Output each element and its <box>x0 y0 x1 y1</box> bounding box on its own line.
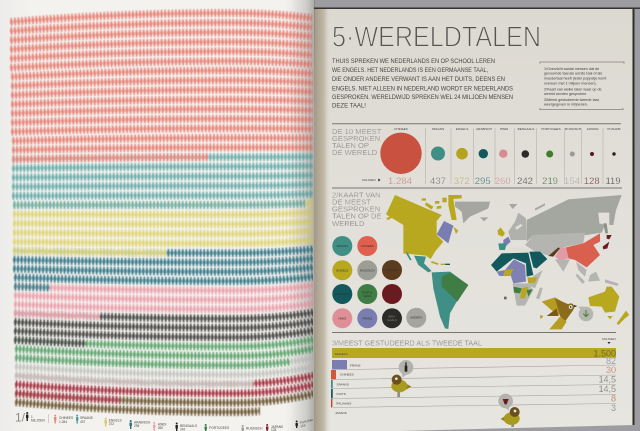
legend: Engels: 372 <box>109 422 114 426</box>
bar: Spaans <box>331 374 616 388</box>
intro text: DEZE TAAL! <box>332 102 366 110</box>
contents key box: weergegeven in miljoenen. <box>544 102 588 106</box>
values: 154 <box>564 176 581 187</box>
legend: Japans <box>266 424 283 431</box>
panel: pictogram legend <box>15 410 313 431</box>
values: 219 <box>542 176 558 187</box>
legend: Hindi: HINDI <box>158 422 166 426</box>
map legend circles: FRANS <box>362 316 372 320</box>
map legend circles <box>332 236 426 328</box>
legend: one million: 1 <box>31 415 33 419</box>
section rules <box>332 187 622 189</box>
heading: DE MEEST <box>332 198 371 207</box>
map legend circles: GAALS <box>387 318 397 322</box>
intro text: THUIS SPREKEN WE NEDERLANDS EN OP SCHOOL LEREN <box>332 58 495 65</box>
bar: Chinees <box>331 365 616 380</box>
icon: bird with bottle bubble <box>391 360 413 397</box>
language labels: PORTUGEES <box>541 127 561 131</box>
heading <box>332 127 382 157</box>
legend: one million: MILJOEN <box>31 418 46 422</box>
values: 372 <box>454 176 470 187</box>
heading <box>332 191 382 228</box>
contents key box: 3/Meest gestudeerde tweede taal, <box>544 98 600 102</box>
map legend circles: PUNJABI <box>386 268 398 272</box>
right page background <box>316 9 634 431</box>
heading: GESPROKEN <box>332 134 380 143</box>
bar: Italiaans: 8 <box>611 394 616 404</box>
bar: Engels <box>332 348 616 358</box>
intro text <box>332 58 513 110</box>
map legend circles: PORTU- <box>362 290 373 294</box>
map legend circles: ARABISCH <box>335 292 350 296</box>
heading: DE WERELD <box>332 148 378 157</box>
language labels: RUSSISCH <box>565 127 581 131</box>
legend number: 1/ <box>15 410 26 424</box>
intro text: WE ENGELS. HET NEDERLANDS IS EEN GERMAANSE TAAL, <box>332 67 488 74</box>
bar: Engels: ENGELS <box>335 352 348 356</box>
legend: Portugees: PORTUGEES <box>209 426 229 430</box>
legend: Spaans: 437 <box>80 420 86 424</box>
language labels: ARABISCH <box>476 127 492 131</box>
legend: Russisch: RUSSISCH <box>246 426 263 430</box>
legend: Arabisch: ARABISCH <box>134 420 151 424</box>
bar: Chinees: CHINEES <box>340 372 354 376</box>
bar: Japans: JAPANS <box>335 411 347 415</box>
contents key box: wereld worden gesproken. <box>544 92 587 96</box>
contents key box: genoemde taal als eerste taal of als <box>544 72 602 76</box>
unit label: MILJOEN <box>602 337 616 341</box>
values: 119 <box>605 176 621 187</box>
legend: Engels: ENGELS <box>109 418 122 422</box>
legend: Engels <box>104 418 122 426</box>
values: 128 <box>584 176 600 187</box>
spine shadow over the grid <box>290 0 315 431</box>
legend: Hindi <box>153 422 166 431</box>
contents key box: overeen met 1 miljoen mensen). <box>544 82 597 86</box>
bar: Engels: 1.500 <box>593 348 616 358</box>
map legend circles: BEN- <box>389 314 395 318</box>
legend: Chinees: 1.284 <box>59 420 67 424</box>
bar: Italiaans <box>331 394 616 408</box>
language labels: SPAANS <box>432 127 444 131</box>
heading: 2/KAART VAN <box>332 191 381 200</box>
legend: Arabisch: 295 <box>134 424 140 428</box>
values <box>388 176 621 187</box>
panel: ten most spoken languages <box>332 127 621 187</box>
legend: Spaans: SPAANS <box>80 416 93 420</box>
bar: Duits: DUITS <box>336 392 346 396</box>
legend: Bengaals <box>176 422 197 431</box>
backdrop behind the book <box>314 0 640 431</box>
map legend circles: ENGELS <box>336 268 348 272</box>
map: Europe, Asia, Africa and Oceania <box>491 195 629 329</box>
proportional circles <box>380 133 616 174</box>
legend: Punjabi: PUNJABI <box>299 418 313 425</box>
contents key box: 1/Overzicht aantal mensen dat de <box>544 67 599 71</box>
legend: Russisch <box>242 425 263 431</box>
legend: Japans: JAPANS <box>271 425 283 429</box>
language labels: JAPANS <box>587 127 598 131</box>
icon: bird on map <box>540 297 577 329</box>
contents key box: moedertaal heeft (ieder poppetje komt <box>544 76 606 80</box>
section rules <box>332 123 621 125</box>
contents key box <box>540 62 624 110</box>
right page edge <box>632 9 634 425</box>
contents key box: 2/Kaart van welke talen waar op de <box>544 88 602 92</box>
unit label <box>602 337 616 344</box>
unit label: MILJOEN <box>362 178 376 182</box>
language labels: CHINEES <box>394 127 408 131</box>
bar: Chinees: 30 <box>606 365 616 375</box>
icon: bird with cow bubble <box>498 394 520 427</box>
heading: DE 10 MEEST <box>332 127 382 136</box>
legend: Portugees <box>204 424 229 431</box>
legend divider <box>47 414 50 423</box>
intro text: DIE ONDER ANDERE VERWANT IS AAN HET DUITS, DEENS EN <box>332 76 505 83</box>
language labels: PUNJABI <box>607 127 621 131</box>
heading: TALEN OP DE <box>332 212 382 221</box>
map legend circles: GEES <box>363 294 371 298</box>
panel: pictogram grid of one million people per figure <box>10 13 317 412</box>
panel: most studied second languages <box>331 337 616 427</box>
bar: Duits <box>331 384 616 398</box>
section rule <box>332 332 616 334</box>
legend: one million <box>26 412 46 422</box>
bar: Frans <box>332 356 616 370</box>
map legend circles: HINDI <box>338 316 346 320</box>
bar: Japans <box>335 403 616 415</box>
values: 1.284 <box>388 176 413 187</box>
values: 295 <box>475 176 491 187</box>
legend: Hindi: 260 <box>158 426 163 430</box>
heading: TALEN OP <box>332 141 369 150</box>
map: Americas <box>386 195 490 329</box>
values: 242 <box>517 176 533 187</box>
legend: Chinees <box>54 415 73 424</box>
map legend circles: CHINEES <box>361 244 374 248</box>
map legend circles: SPAANS <box>337 244 348 248</box>
panel: language map <box>332 191 629 329</box>
values: 260 <box>495 176 511 187</box>
values: 437 <box>430 176 446 187</box>
map legend circles: RUSSISCH <box>360 268 375 272</box>
book spine <box>314 9 330 431</box>
row rules <box>333 365 616 408</box>
column dividers <box>426 128 603 184</box>
icon: speech bubble with plant <box>578 307 593 321</box>
language labels: BENGAALS <box>518 127 534 131</box>
intro text: GESPROKEN. WERELDWIJD SPREKEN WEL 24 MILJOEN MENSEN <box>332 94 513 101</box>
heading: WERELD <box>332 219 365 228</box>
bar: Spaans: SPAANS <box>336 382 349 386</box>
bar: Frans: 82 <box>606 356 616 366</box>
heading: GESPROKEN <box>332 205 380 214</box>
left page background <box>0 0 316 431</box>
map legend circles: JAPANS <box>386 292 398 296</box>
legend: Arabisch <box>130 420 151 429</box>
top page edge <box>314 8 640 9</box>
legend: Punjabi: 119 <box>300 423 306 428</box>
legend: Spaans <box>76 415 93 424</box>
map legend circles: ANDERS <box>410 316 422 320</box>
bar: Japans: 3 <box>611 403 616 413</box>
legend: Chinees: CHINEES <box>59 416 73 420</box>
bar: Frans: FRANS <box>350 364 360 368</box>
bar: Duits: 14,5 <box>598 384 616 394</box>
heading: 3/MEEST GESTUDEERD ALS TWEEDE TAAL <box>332 338 482 348</box>
language labels: ENGELS <box>456 127 468 131</box>
intro text: ENGELS. NIET ALLEEN IN NEDERLAND WORDT ER NEDERLANDS <box>332 86 513 92</box>
language labels <box>394 127 621 131</box>
bar: Italiaans: ITALIAANS <box>336 402 351 406</box>
language labels: HINDI <box>500 127 508 131</box>
title: 5·WERELDTALEN <box>332 22 541 54</box>
legend: Bengaals: BENGAALS <box>180 424 197 428</box>
bar: Spaans: 14,5 <box>598 374 616 384</box>
legend: Punjabi <box>296 418 313 428</box>
